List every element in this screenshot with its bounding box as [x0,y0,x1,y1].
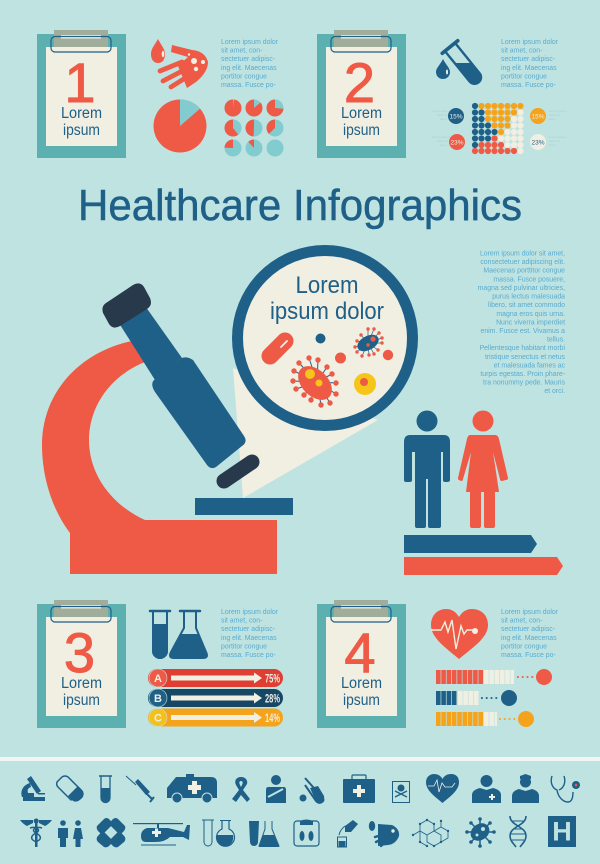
text block 4: massa. Fusce po- [501,652,556,659]
icon: solid tube and flask [249,821,279,847]
icon: heart with pulse [431,609,488,659]
bar C 14%: 14% [265,713,280,725]
text block 2: massa. Fusce po- [501,82,556,89]
percentage badges [448,108,546,150]
right text block: Maecenas porttitor congue [483,268,565,275]
tiny badge captions: dolor sit [437,113,448,117]
right text block: et malesuada fames ac [494,362,566,369]
tiny badge captions: Lorem ipsum [549,135,567,139]
right text block: tra nonummy pede. Mauris [483,380,566,387]
microscope tube [117,303,246,468]
tiny badge captions: dolor sit [437,139,448,143]
text block 3: ing elit. Maecenas [221,635,277,642]
clipboard 1: 1 [64,51,96,114]
right text block: tellus. [547,337,565,344]
percentage badges: 15% [449,114,463,120]
bar C 14% [148,708,283,726]
text block 2: sit amet, con- [501,48,542,55]
title: Healthcare Infographics [78,181,522,230]
man figure [404,410,450,528]
clipboard 4 [317,600,406,728]
tiny badge captions: dolor sit [549,139,560,143]
icon: tube and round flask [202,820,234,846]
clipboard 2: Lorem [341,105,382,122]
icon: scale with feet [294,820,319,846]
icon: test tube with drop [436,41,486,89]
text block 3: Lorem ipsum dolor [221,609,279,616]
icon: first aid kit [343,775,375,803]
progress row red [436,669,552,685]
right text block: magna eros quis urna. [496,311,565,318]
text block 1: sectetuer adipisc- [221,56,275,63]
icon: molecule [412,819,449,847]
tiny badge captions: amet [440,117,447,121]
text block 4: ing elit. Maecenas [501,635,557,642]
tiny badge captions [432,109,567,147]
text block 3: sit amet, con- [221,618,262,625]
comparison arrows [404,535,563,575]
text block 3: massa. Fusce po- [221,652,276,659]
text block 3: sectetuer adipisc- [221,626,275,633]
icon: hand with blood drop [151,39,208,88]
clipboard 3 [37,600,126,728]
right text block: turpis egestas. Proin phare- [480,371,565,378]
progress row yellow [436,711,534,727]
bacteria pill [270,341,287,356]
icon: caduceus [20,818,52,847]
large virus [290,355,339,408]
clipboard 3: ipsum [63,692,100,709]
text block 2: Lorem ipsum dolor [501,39,559,46]
right text block: et orci. [544,388,565,395]
icon: stethoscope [551,776,580,802]
icon: ambulance [167,774,217,803]
objective lens [224,462,252,481]
magnifier heading: ipsum dolor [270,298,384,325]
microscope arm [42,341,277,574]
right text block: tristique senectus et netus [485,354,566,361]
icon row 1 [21,774,580,803]
right text block: Nunc viverra imperdiet [496,319,565,326]
right text block: Lorem ipsum dolor sit amet, [480,250,565,258]
clipboard 2 [317,30,406,158]
text block 4: sectetuer adipisc- [501,626,555,633]
text block 3 [221,609,279,659]
right text block: enim. Fusce est. Vivamus a [480,328,565,335]
footer band [0,757,600,761]
icon: man and woman [58,820,83,847]
right text block: massa. Fusce posuere, [493,276,565,283]
magnifier heading [270,272,384,325]
magnifier circle [238,250,412,426]
bar A 75%: 75% [265,674,280,686]
small pie charts grid [224,100,284,156]
tiny badge captions: Lorem ipsum [432,135,450,139]
icon: pill [57,776,84,802]
bar B 28%: 28% [265,694,280,706]
icon: microscope [21,776,45,801]
right text block: magna sed pulvinar ultricies, [478,285,565,292]
dot matrix chart [472,103,524,154]
tiny badge captions: Lorem ipsum [549,109,567,113]
text block 2: ing elit. Maecenas [501,65,557,72]
tiny badge captions: amet [549,143,556,147]
text block 4: sit amet, con- [501,618,542,625]
text block 1: massa. Fusce po- [221,82,276,89]
clipboard 3: 3 [64,621,95,684]
bar C 14%: C [154,712,162,724]
pie chart large [154,100,206,152]
text block 4: Lorem ipsum dolor [501,609,559,616]
icon: virus [465,817,496,848]
icon: helicopter [133,823,190,845]
clipboard 1: Lorem [61,105,102,122]
bar B 28%: B [154,693,162,705]
icon: ribbon [232,777,250,802]
tiny badge captions: Lorem ipsum [432,109,450,113]
light cone [233,368,378,498]
text block 1: Lorem ipsum dolor [221,39,279,46]
stage [195,498,293,515]
icon: hand with drop [369,821,399,846]
icon: test tube [99,776,112,802]
icon: heart [426,774,459,803]
icon: bandage [97,818,125,847]
text block 3: portitor congue [221,643,267,650]
icon: hospital sign [548,816,576,847]
icon: test tube and flask [150,611,208,659]
woman figure [458,410,508,528]
icon: doctor [472,775,501,803]
percentage badges: 23% [450,140,464,146]
microscope eyepiece [102,283,151,328]
text block 1 [221,39,279,89]
right text block: purus lectus malesuada [492,294,565,301]
right text block: consectetuer adipiscing elit. [480,259,565,266]
clipboard 2: 2 [344,51,375,114]
icon: bottle pouring [338,820,358,847]
percentage badges: 15% [531,114,545,120]
tiny badge captions: amet [440,143,447,147]
text block 1: sit amet, con- [221,48,262,55]
clipboard 1: ipsum [63,122,100,139]
progress row blue [436,690,517,706]
text block 2: sectetuer adipisc- [501,56,555,63]
right text block: Pellentesque habitant morbi [480,345,565,352]
text block 1: ing elit. Maecenas [221,65,277,72]
text block 4 [501,609,559,659]
clipboard 3: Lorem [61,675,102,692]
magnifier heading: Lorem [296,272,358,299]
text block 2: portitor congue [501,73,547,80]
percentage badges: 23% [531,140,545,146]
right text block [478,250,566,395]
clipboard 4: ipsum [343,692,380,709]
clipboard 1 [37,30,126,158]
icon: nurse [512,774,539,803]
clipboard 2: ipsum [343,122,380,139]
tiny badge captions: amet [549,117,556,121]
bar A 75%: A [154,673,162,685]
small virus [353,327,384,358]
yellow cell [354,373,376,395]
icon: poison frame [392,782,410,802]
bar B 28% [148,689,283,707]
bar A 75% [148,669,283,687]
clipboard 4: Lorem [341,675,382,692]
microscope [42,283,378,574]
icon row 2 [20,816,576,848]
icon: hospital sign: H [552,816,572,846]
clipboard 4: 4 [344,621,376,684]
tiny badge captions: dolor sit [549,113,560,117]
text block 1: portitor congue [221,73,267,80]
icon: tube and drop [300,778,324,803]
icon: person with sling [266,775,286,803]
text block 4: portitor congue [501,643,547,650]
icon: DNA [510,816,526,847]
right text block: libero, sit amet commodo [488,302,565,309]
icon: syringe [126,776,154,802]
text block 2 [501,39,559,89]
